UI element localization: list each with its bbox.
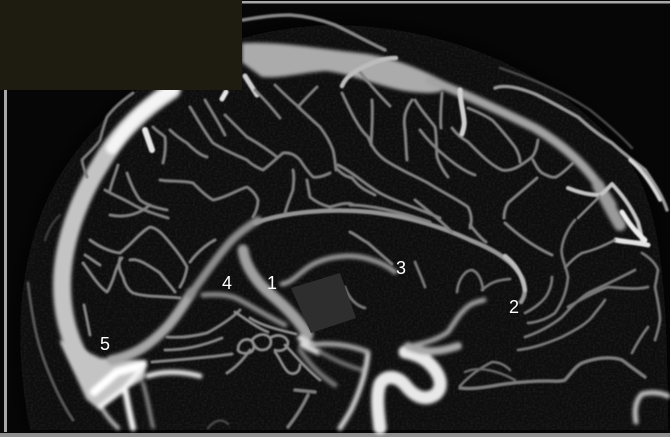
venogram: S-shaped sigmoid sinus <box>300 300 668 428</box>
upper hemisphere veins left <box>105 85 430 222</box>
right temporal bright cluster <box>568 184 642 242</box>
label 2: 2 <box>509 297 519 317</box>
venogram: torcular confluence and occipital veins <box>62 342 200 428</box>
label 3: 3 <box>396 258 406 278</box>
long thalamostriate arch <box>255 210 525 302</box>
fan of temporal veins <box>345 220 660 353</box>
label 5: 5 <box>100 334 110 354</box>
dark redaction box <box>0 0 242 90</box>
lower inferior veins <box>288 390 315 427</box>
deep venous tangle <box>235 312 320 380</box>
grey occluding quadrilateral <box>291 273 356 333</box>
venogram: straight sinus and deep veins <box>112 220 395 360</box>
lower temporal vein <box>460 358 645 389</box>
upper hemisphere veins right <box>336 72 573 264</box>
label 4: 4 <box>222 273 232 293</box>
bright short stubs <box>145 58 464 150</box>
outer scalp veins <box>495 86 667 210</box>
venogram: superior sagittal sinus <box>62 44 620 378</box>
occipital veins between sinuses <box>83 227 250 373</box>
label 1: 1 <box>267 273 277 293</box>
